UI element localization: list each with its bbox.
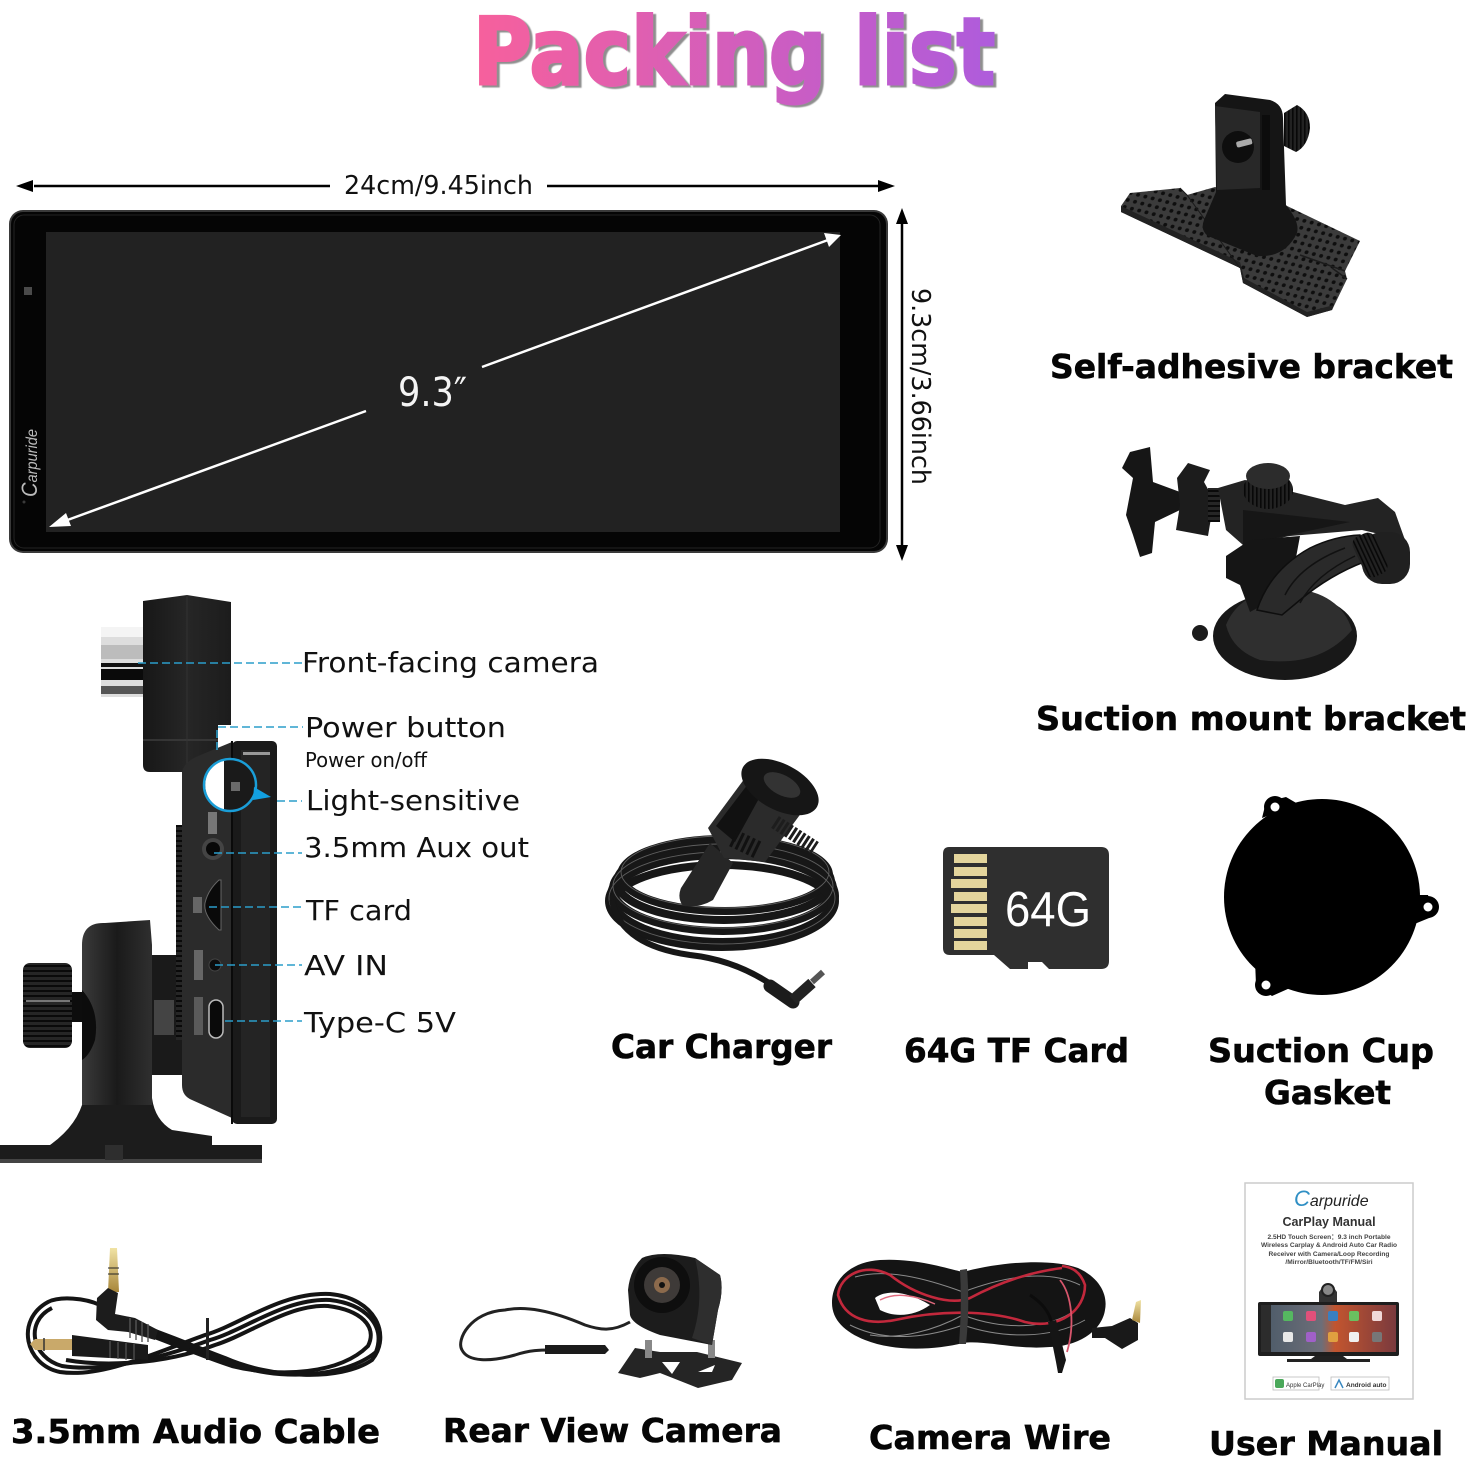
width dimension arrow: 24cm/9.45inch (344, 171, 533, 201)
callout labels (302, 646, 599, 1039)
manual description: Wireless Carplay & Android Auto Car Radio (1261, 1242, 1397, 1249)
height dimension arrow: 9.3cm/3.66inch (905, 288, 935, 485)
title: Packing list (473, 0, 995, 106)
ports (193, 812, 224, 1038)
device side view with mount (0, 595, 277, 1163)
light-sensitive magnifier (204, 759, 271, 811)
label: rear view camera: Rear View Camera (443, 1411, 782, 1450)
device front: screen: Carpuride (17, 429, 42, 497)
icon: suction cup gasket (1224, 796, 1439, 996)
device body (176, 741, 277, 1124)
label: suction mount bracket: Suction mount bracket (1036, 699, 1466, 738)
label: suction cup gasket (1208, 1031, 1434, 1112)
device front: screen (9, 210, 888, 553)
manual description: Receiver with Camera/Loop Recording (1269, 1251, 1389, 1258)
icon: 64G TF card: 64G (1005, 883, 1091, 937)
manual badges: Android auto (1346, 1382, 1386, 1389)
manual heading: CarPlay Manual (1282, 1215, 1376, 1229)
icon: self-adhesive bracket (1121, 94, 1360, 317)
label: 64G TF card: 64G TF Card (904, 1031, 1129, 1070)
callout labels: Power on/off (305, 748, 428, 772)
label: camera wire: Camera Wire (869, 1418, 1111, 1457)
callout labels: TF card (305, 894, 412, 927)
label: user manual: User Manual (1209, 1424, 1443, 1463)
label: self-adhesive bracket: Self-adhesive bracket (1050, 347, 1453, 386)
icon: rear view camera (461, 1254, 742, 1388)
label: suction cup gasket: Gasket (1264, 1073, 1391, 1112)
callout labels: AV IN (304, 949, 388, 982)
connector between arm and cup (1226, 536, 1300, 612)
manual logo: Carpuride (1294, 1186, 1369, 1211)
icon: camera wire (832, 1260, 1141, 1373)
label: car charger: Car Charger (611, 1027, 833, 1066)
manual badges (1273, 1377, 1389, 1390)
callout labels: Light-sensitive (306, 784, 520, 817)
manual device photo (1258, 1284, 1399, 1362)
label: 3.5mm audio cable: 3.5mm Audio Cable (11, 1412, 380, 1451)
manual description (1261, 1234, 1397, 1266)
width dimension arrow (16, 171, 895, 201)
callout labels: 3.5mm Aux out (304, 831, 529, 864)
callout labels: Power button (305, 711, 506, 744)
camera module (101, 595, 231, 772)
manual description: /Mirror/Bluetooth/TF/FM/Siri (1285, 1259, 1373, 1266)
callout labels: Type-C 5V (303, 1006, 456, 1039)
callout labels: Front-facing camera (302, 646, 599, 679)
mount base (0, 920, 262, 1163)
height dimension arrow (896, 208, 935, 561)
icon: car charger (609, 747, 835, 1002)
screen diagonal size: 9.3″ (398, 370, 467, 416)
label: suction cup gasket: Suction Cup (1208, 1031, 1434, 1070)
manual description: 2.5HD Touch Screen：9.3 inch Portable (1268, 1234, 1391, 1241)
callout lines (138, 663, 303, 1021)
icon: user manual (1245, 1183, 1413, 1399)
icon: suction mount bracket (1122, 447, 1410, 680)
icon: 3.5mm audio cable (28, 1248, 380, 1375)
screen diagonal size (49, 233, 841, 527)
manual badges: Apple CarPlay (1286, 1383, 1324, 1389)
icon: 64G TF card (943, 847, 1109, 969)
